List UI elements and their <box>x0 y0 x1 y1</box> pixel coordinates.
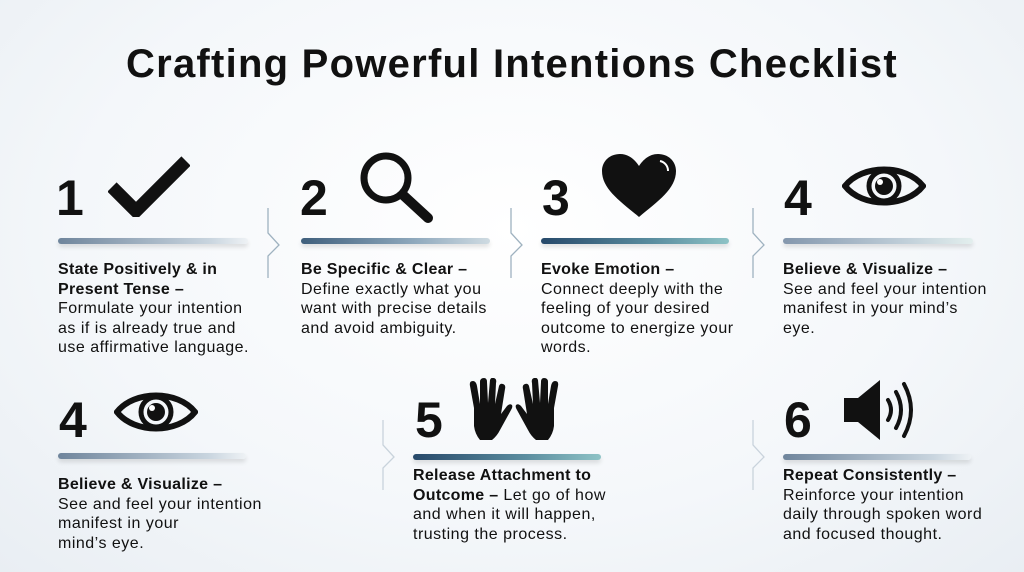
text <box>783 467 982 543</box>
icon: magnifier <box>360 152 433 223</box>
text <box>413 467 606 543</box>
text: as if is already true and <box>58 320 236 337</box>
icon: hands <box>470 378 558 440</box>
number 4: 4 <box>59 392 87 448</box>
text: use affirmative language. <box>58 339 249 356</box>
text: daily through spoken word <box>783 506 982 523</box>
text: See and feel your intention <box>783 281 987 298</box>
arrow <box>752 208 765 278</box>
icon: checkmark <box>108 156 190 217</box>
text <box>541 261 734 356</box>
arrow <box>382 420 395 490</box>
text <box>783 261 987 337</box>
icon: eye <box>842 166 926 206</box>
text: Define exactly what you <box>301 281 481 298</box>
text: Be Specific & Clear – <box>301 261 467 278</box>
arrow <box>267 208 280 278</box>
text: manifest in your mind’s <box>783 300 958 317</box>
number 3: 3 <box>542 170 570 226</box>
panel: step 5 <box>412 378 606 543</box>
text: Evoke Emotion – <box>541 261 674 278</box>
arrow <box>752 420 765 490</box>
panel: step 1 <box>56 156 249 356</box>
bar <box>783 238 973 244</box>
text: mind’s eye. <box>58 535 144 552</box>
icon: eye <box>114 392 198 432</box>
text: Connect deeply with the <box>541 281 723 298</box>
text: and focused thought. <box>783 526 942 543</box>
icon: speaker <box>844 380 913 440</box>
text: Outcome – Let go of how <box>413 487 606 504</box>
text: and avoid ambiguity. <box>301 320 457 337</box>
text: Believe & Visualize – <box>783 261 947 278</box>
text: See and feel your intention <box>58 496 262 513</box>
bar <box>58 238 248 244</box>
text: Formulate your intention <box>58 300 243 317</box>
bar <box>541 238 729 244</box>
text: want with precise details <box>301 300 487 317</box>
bar <box>783 454 971 460</box>
text: Believe & Visualize – <box>58 476 222 493</box>
bar <box>58 453 246 459</box>
text: trusting the process. <box>413 526 568 543</box>
panel: step 6 <box>782 380 982 543</box>
panel: step 4 repeat <box>58 392 262 552</box>
title: Crafting Powerful Intentions Checklist <box>126 42 898 86</box>
number 4: 4 <box>784 170 812 226</box>
panel: step 4 <box>782 166 987 337</box>
text: feeling of your desired <box>541 300 710 317</box>
text: words. <box>541 339 591 356</box>
text <box>58 261 249 356</box>
text: and when it will happen, <box>413 506 596 523</box>
bar <box>301 238 490 244</box>
text: Reinforce your intention <box>783 487 964 504</box>
arrow <box>510 208 523 278</box>
text: Repeat Consistently – <box>783 467 956 484</box>
text <box>58 476 262 552</box>
panel: step 3 <box>540 154 734 356</box>
number 5: 5 <box>415 392 443 448</box>
text: Release Attachment to <box>413 467 591 484</box>
panel: step 2 <box>300 152 490 337</box>
text <box>301 261 487 337</box>
number 2: 2 <box>300 170 328 226</box>
text: eye. <box>783 320 815 337</box>
text: State Positively & in <box>58 261 217 278</box>
text: manifest in your <box>58 515 179 532</box>
text: outcome to energize your <box>541 320 734 337</box>
text: Present Tense – <box>58 281 184 298</box>
number 6: 6 <box>784 392 812 448</box>
number 1: 1 <box>56 170 84 226</box>
icon: heart <box>602 154 676 217</box>
bar <box>413 454 601 460</box>
